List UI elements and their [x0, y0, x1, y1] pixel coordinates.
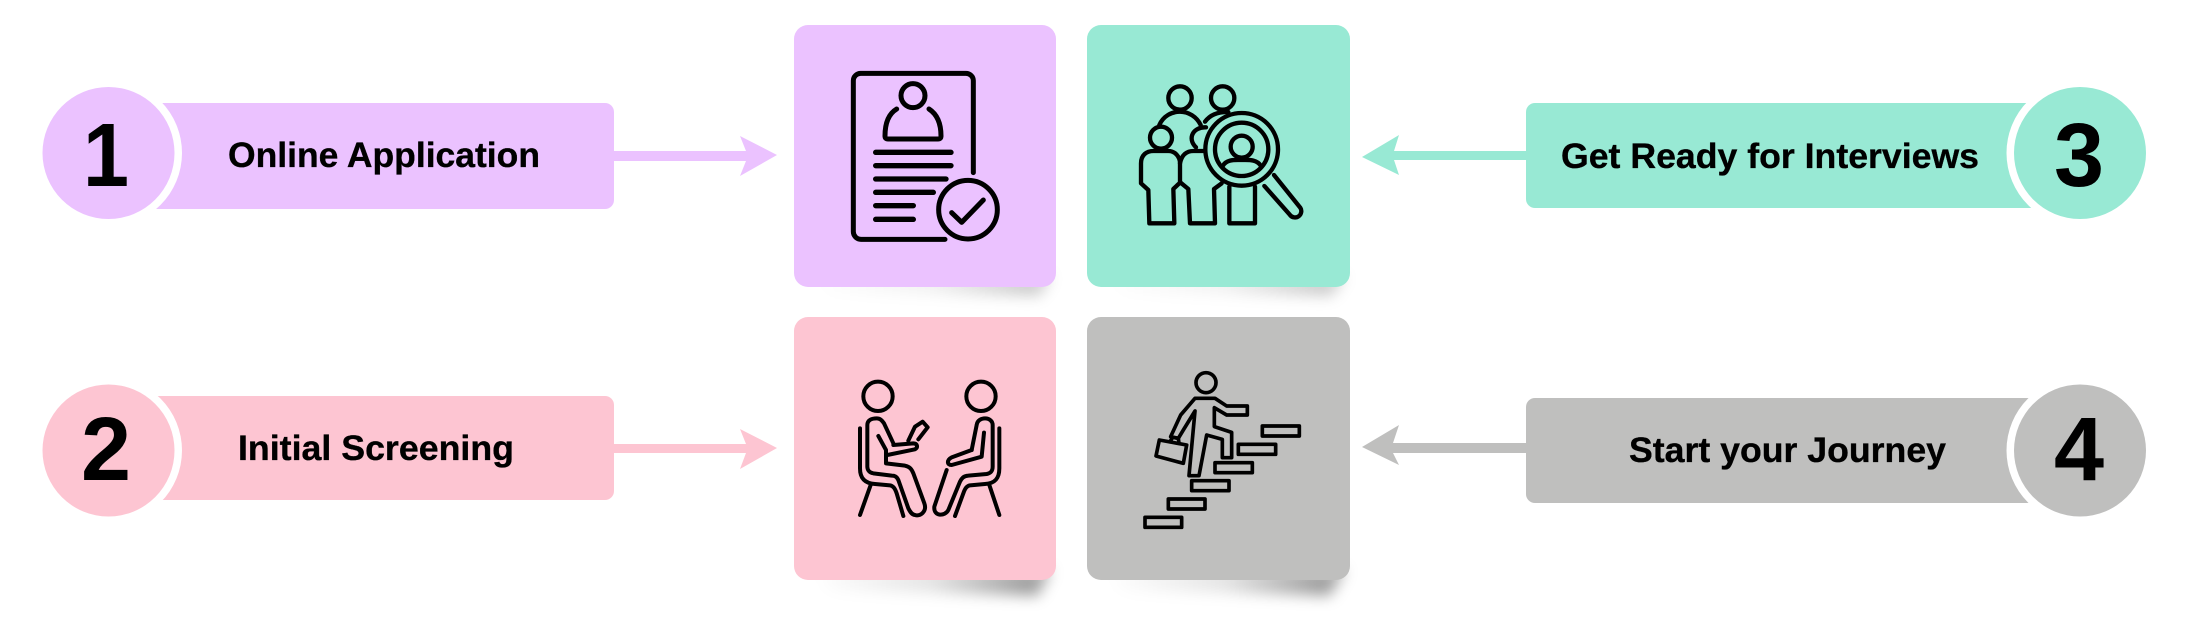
- step 1: online application banner: [35, 80, 777, 226]
- number 3: 3: [2054, 106, 2104, 206]
- arrow 1: [610, 136, 777, 176]
- panel: screening card: [794, 317, 1056, 580]
- number 2: 2: [81, 400, 131, 500]
- icon: people under magnifying glass: [1141, 86, 1301, 223]
- label: online application: Online Application: [228, 135, 540, 175]
- arrow 3: [1362, 135, 1530, 175]
- circle ring 1: [35, 80, 182, 226]
- panel: journey card: [1087, 317, 1350, 580]
- number circle 4: [2014, 384, 2146, 516]
- label: initial screening: Initial Screening: [238, 428, 514, 468]
- icon: resume with check mark: [853, 73, 997, 239]
- arrow 4: [1362, 425, 1530, 465]
- number circle 3: [2014, 87, 2146, 219]
- label: start your journey: Start your Journey: [1629, 430, 1946, 470]
- label: get ready for interviews: Get Ready for Interviews: [1561, 136, 1979, 176]
- step 3: interviews banner: [1362, 80, 2154, 226]
- panel: application card: [794, 25, 1056, 287]
- circle ring 3: [2006, 80, 2154, 226]
- label bar 3: [1526, 103, 2056, 208]
- icon: person climbing stairs with briefcase: [1145, 373, 1299, 527]
- label bar 1: [120, 103, 614, 209]
- label bar 4: [1526, 398, 2056, 503]
- circle ring 2: [35, 377, 182, 524]
- circle ring 4: [2006, 377, 2154, 524]
- step 2: initial screening banner: [35, 377, 777, 524]
- icon: two people seated in conversation: [860, 382, 999, 516]
- arrow 2: [610, 429, 777, 469]
- label bar 2: [120, 396, 614, 500]
- number circle 2: [42, 384, 174, 516]
- number 1: 1: [83, 106, 129, 206]
- panel: interview candidates card: [1087, 25, 1350, 287]
- number circle 1: [42, 87, 174, 219]
- number 4: 4: [2054, 400, 2104, 500]
- step 4: journey banner: [1362, 377, 2154, 524]
- card shadows: [812, 276, 1346, 596]
